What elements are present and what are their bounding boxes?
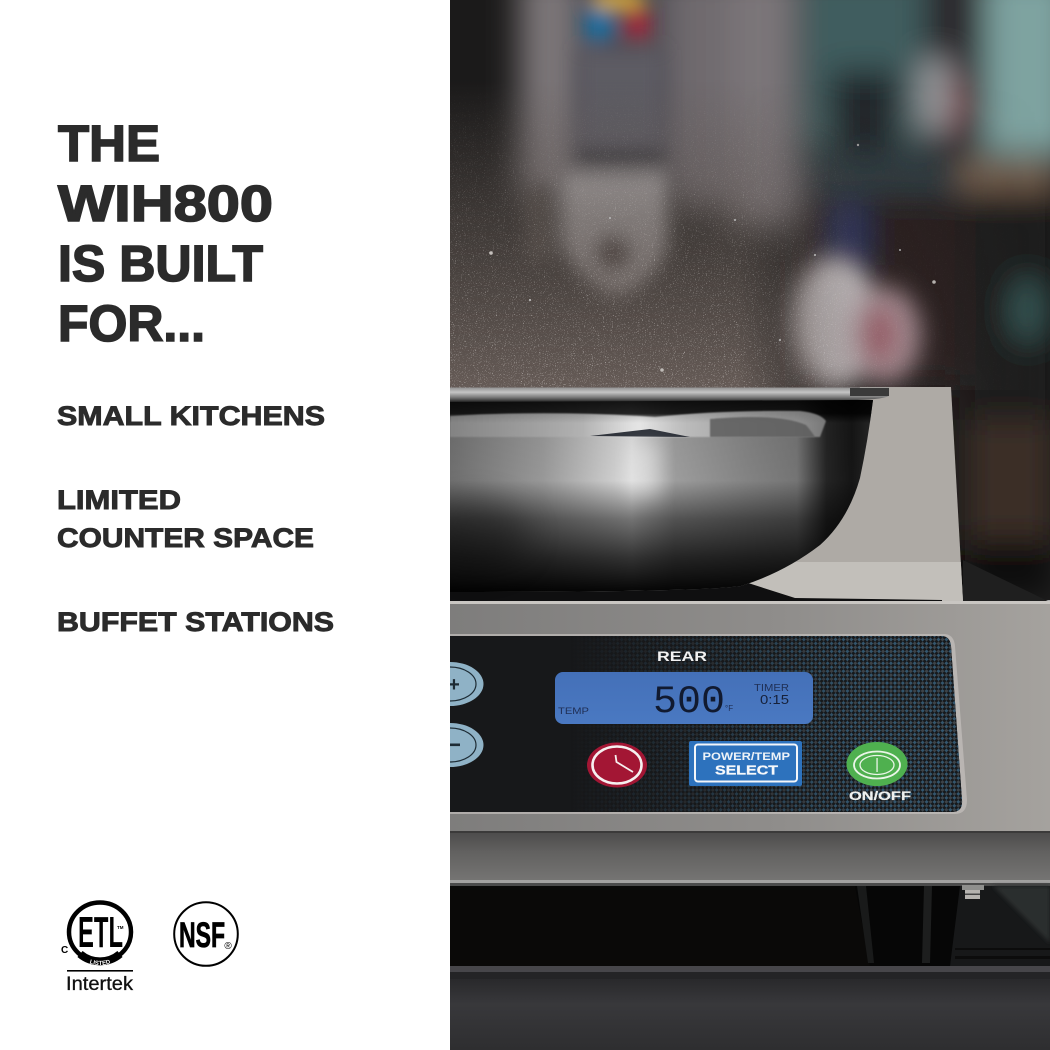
- list item: small kitchens: SMALL KITCHENS: [57, 401, 325, 431]
- logo: ETL listed Intertek: C: [61, 945, 68, 956]
- logo: NSF: [174, 902, 238, 966]
- logo: ETL listed Intertek: TM: [117, 925, 124, 930]
- title: FOR...: [58, 295, 205, 352]
- LCD display: °F: [725, 704, 733, 713]
- logo: ETL listed Intertek: ETL: [78, 908, 123, 957]
- list item: limited counter space: [57, 485, 314, 553]
- cooktop front fascia: [450, 601, 1050, 886]
- list item: buffet stations: BUFFET STATIONS: [57, 607, 334, 637]
- dust specks: [489, 144, 936, 372]
- LCD display: 500: [653, 680, 725, 724]
- logo: ETL listed Intertek: [61, 900, 134, 995]
- button: power temp select: SELECT: [715, 762, 778, 778]
- blurred kitchen background: [450, 0, 1050, 600]
- list item: limited counter space: COUNTER SPACE: [57, 523, 314, 553]
- LCD display: 0:15: [760, 692, 789, 707]
- title: WIH800: [58, 175, 273, 232]
- label: REAR: REAR: [657, 648, 707, 664]
- button: plus: [450, 662, 484, 706]
- logo: ETL listed Intertek: Intertek: [66, 974, 134, 995]
- foot screw: [962, 885, 984, 899]
- LCD display: TEMP: [558, 706, 589, 717]
- button: power temp select: POWER/TEMP: [702, 751, 790, 763]
- LCD display: TIMER: [754, 683, 789, 694]
- dark gap below cooktop with legs: [450, 885, 1050, 966]
- photo: induction cooktop with pan: [416, 0, 1050, 1050]
- panel: white text column: [56, 115, 334, 995]
- button: timer clock: [587, 742, 647, 788]
- button: minus: [450, 723, 484, 767]
- LCD display: [555, 672, 813, 724]
- logo: NSF: NSF: [179, 916, 225, 955]
- button: on/off: ON/OFF: [849, 791, 911, 803]
- counter surface: [450, 966, 1050, 1050]
- list item: limited counter space: LIMITED: [57, 485, 181, 515]
- frying pan: [420, 388, 889, 592]
- cooktop rear housing: [450, 387, 1050, 602]
- button: plus: +: [448, 674, 460, 696]
- control panel: [416, 636, 962, 812]
- rising steam and dust: [450, 94, 996, 390]
- button: on/off: [846, 742, 911, 803]
- title: THE: [58, 115, 160, 172]
- title: IS BUILT: [58, 235, 263, 292]
- title: [58, 115, 273, 352]
- logo: ETL listed Intertek: LISTED: [90, 960, 110, 965]
- button: power temp select: [689, 741, 802, 786]
- logo: NSF: ®: [224, 941, 232, 952]
